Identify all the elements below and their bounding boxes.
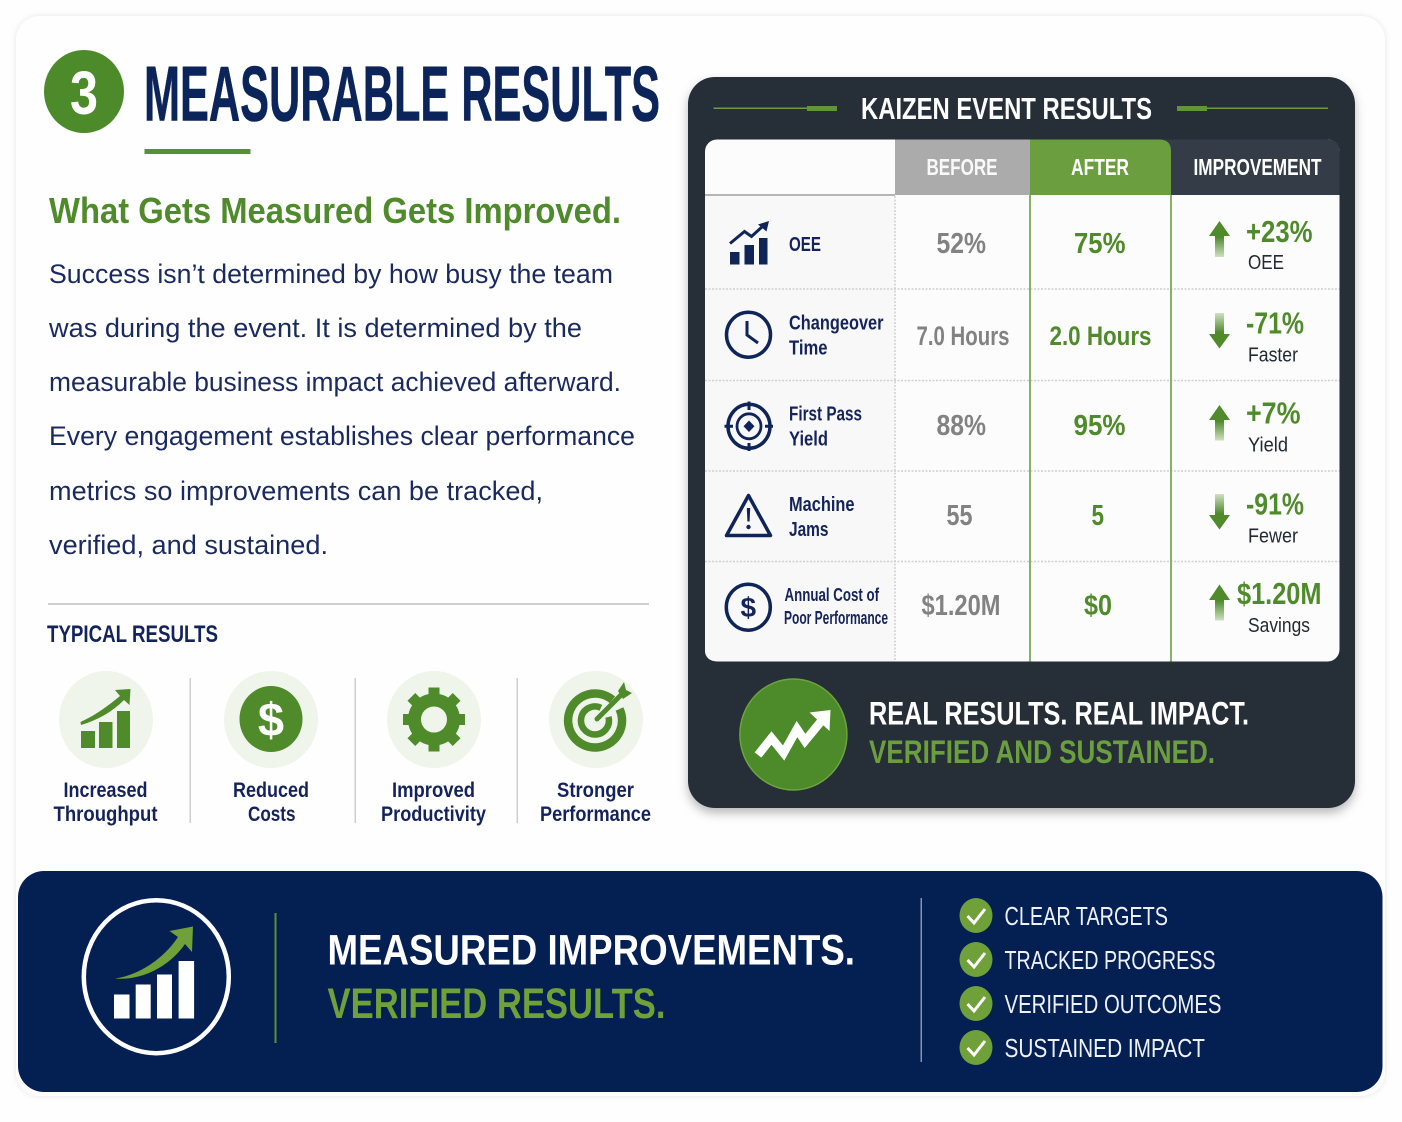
icon: crosshair target bbox=[724, 402, 773, 451]
row: machine jams: Jams bbox=[789, 519, 828, 541]
check: sustained impact: SUSTAINED IMPACT bbox=[1004, 1033, 1205, 1063]
arrow down bbox=[1209, 494, 1230, 530]
row: annual cost of poor performance: Poor Performance bbox=[784, 608, 888, 628]
check: sustained impact bbox=[960, 1030, 1205, 1065]
icon: warning triangle bbox=[726, 496, 770, 536]
row: annual cost of poor performance: $1.20M bbox=[922, 590, 1000, 622]
banner headline: VERIFIED RESULTS. bbox=[328, 980, 666, 1028]
arrow up bbox=[1209, 584, 1230, 620]
icon: growth chart ring bbox=[84, 900, 229, 1053]
icon: chart bbox=[730, 221, 769, 264]
table header row bbox=[705, 140, 1340, 196]
row: OEE bbox=[730, 214, 1312, 274]
panel tagline: VERIFIED AND SUSTAINED. bbox=[869, 734, 1215, 770]
row: annual cost of poor performance: Annual Cost of bbox=[784, 585, 880, 605]
body text: metrics so improvements can be tracked, bbox=[49, 476, 543, 506]
body text bbox=[48, 259, 635, 560]
label: Improved bbox=[392, 779, 475, 802]
panel: kaizen event results bbox=[688, 77, 1355, 808]
title underline bbox=[144, 149, 250, 154]
row: OEE: 52% bbox=[936, 228, 986, 260]
row: annual cost of poor performance: $1.20M bbox=[1237, 576, 1322, 611]
body text: Success isn’t determined by how busy the team bbox=[49, 259, 613, 289]
row: changeover time: Changeover bbox=[789, 312, 884, 334]
subheading: What Gets Measured Gets Improved. bbox=[49, 190, 621, 231]
icon: dollar circle bbox=[726, 584, 770, 630]
result: stronger performance bbox=[540, 671, 651, 826]
result: increased throughput bbox=[54, 671, 158, 826]
arrow down bbox=[1209, 313, 1230, 348]
check: verified outcomes bbox=[960, 986, 1222, 1021]
row: annual cost of poor performance: $0 bbox=[1084, 590, 1112, 622]
row: changeover time: 7.0 Hours bbox=[916, 321, 1010, 351]
row: changeover time: Faster bbox=[1248, 344, 1298, 366]
label: Reduced bbox=[233, 779, 309, 802]
label bbox=[54, 779, 158, 826]
panel tagline: REAL RESULTS. REAL IMPACT. bbox=[869, 696, 1249, 732]
label: Throughput bbox=[54, 803, 158, 826]
body text: verified, and sustained. bbox=[49, 530, 328, 560]
body text: measurable business impact achieved afterward. bbox=[49, 367, 621, 397]
icon: dollar circle: $ bbox=[741, 592, 757, 623]
label bbox=[540, 779, 651, 826]
row: machine jams: 5 bbox=[1092, 500, 1104, 532]
row: changeover time: 2.0 Hours bbox=[1050, 321, 1152, 351]
results table bbox=[705, 140, 1340, 662]
check: clear targets: CLEAR TARGETS bbox=[1004, 901, 1168, 931]
row: changeover time: Time bbox=[789, 338, 828, 360]
label: Performance bbox=[540, 803, 651, 826]
typical results heading: TYPICAL RESULTS bbox=[47, 621, 218, 648]
checklist bbox=[960, 898, 1222, 1065]
icon: target bbox=[549, 671, 643, 768]
icon: clock bbox=[726, 312, 770, 357]
row: OEE: OEE bbox=[789, 234, 821, 256]
table header row: BEFORE bbox=[926, 154, 998, 180]
row: OEE: 75% bbox=[1074, 228, 1126, 260]
row: machine jams: -91% bbox=[1246, 486, 1304, 522]
row: machine jams: Machine bbox=[789, 494, 854, 516]
row: first pass yield: 88% bbox=[936, 410, 986, 442]
row: first pass yield: Yield bbox=[789, 428, 828, 450]
check: tracked progress: TRACKED PROGRESS bbox=[1004, 945, 1216, 975]
row: OEE: +23% bbox=[1246, 214, 1312, 249]
label: Costs bbox=[248, 803, 296, 826]
table header row: AFTER bbox=[1071, 154, 1129, 180]
row: machine jams: Fewer bbox=[1248, 526, 1298, 548]
row: machine jams bbox=[726, 486, 1304, 548]
row: first pass yield: First Pass bbox=[789, 404, 862, 426]
body text: Every engagement establishes clear performance bbox=[49, 421, 635, 451]
section number badge: 3 bbox=[70, 59, 98, 127]
label: Increased bbox=[64, 779, 148, 802]
row: annual cost of poor performance: Savings bbox=[1248, 615, 1310, 637]
check: verified outcomes: VERIFIED OUTCOMES bbox=[1004, 989, 1222, 1019]
label bbox=[233, 779, 309, 826]
panel tagline bbox=[869, 696, 1249, 770]
row: first pass yield: 95% bbox=[1074, 410, 1126, 442]
title: MEASURABLE RESULTS bbox=[144, 50, 660, 138]
row: annual cost of poor performance bbox=[726, 576, 1322, 637]
section number badge bbox=[44, 50, 124, 133]
label bbox=[381, 779, 486, 826]
icon: dollar coin: $ bbox=[258, 693, 284, 746]
result: reduced costs bbox=[224, 671, 318, 826]
table header row: IMPROVEMENT bbox=[1194, 154, 1322, 180]
row: first pass yield bbox=[724, 396, 1300, 456]
panel heading: KAIZEN EVENT RESULTS bbox=[861, 91, 1152, 126]
arrow up bbox=[1209, 405, 1230, 440]
banner headline bbox=[328, 926, 855, 1028]
icon: growth badge bbox=[740, 679, 847, 790]
row: changeover time: -71% bbox=[1246, 306, 1304, 340]
row: first pass yield: +7% bbox=[1246, 396, 1300, 430]
icon: rising bars bbox=[59, 671, 153, 768]
check: tracked progress bbox=[960, 942, 1216, 977]
row: first pass yield: Yield bbox=[1248, 434, 1288, 456]
label: Stronger bbox=[557, 779, 634, 802]
icon: dollar coin bbox=[224, 671, 318, 768]
arrow up bbox=[1209, 221, 1230, 257]
row: OEE: OEE bbox=[1248, 252, 1284, 274]
row: changeover time bbox=[726, 306, 1304, 366]
icon: gear bbox=[387, 671, 481, 768]
result: improved productivity bbox=[381, 671, 486, 826]
check: clear targets bbox=[960, 898, 1168, 933]
banner headline: MEASURED IMPROVEMENTS. bbox=[328, 926, 855, 974]
label: Productivity bbox=[381, 803, 486, 826]
body text: was during the event. It is determined by the bbox=[48, 313, 582, 343]
bottom banner bbox=[18, 871, 1382, 1092]
row: machine jams: 55 bbox=[946, 500, 972, 532]
